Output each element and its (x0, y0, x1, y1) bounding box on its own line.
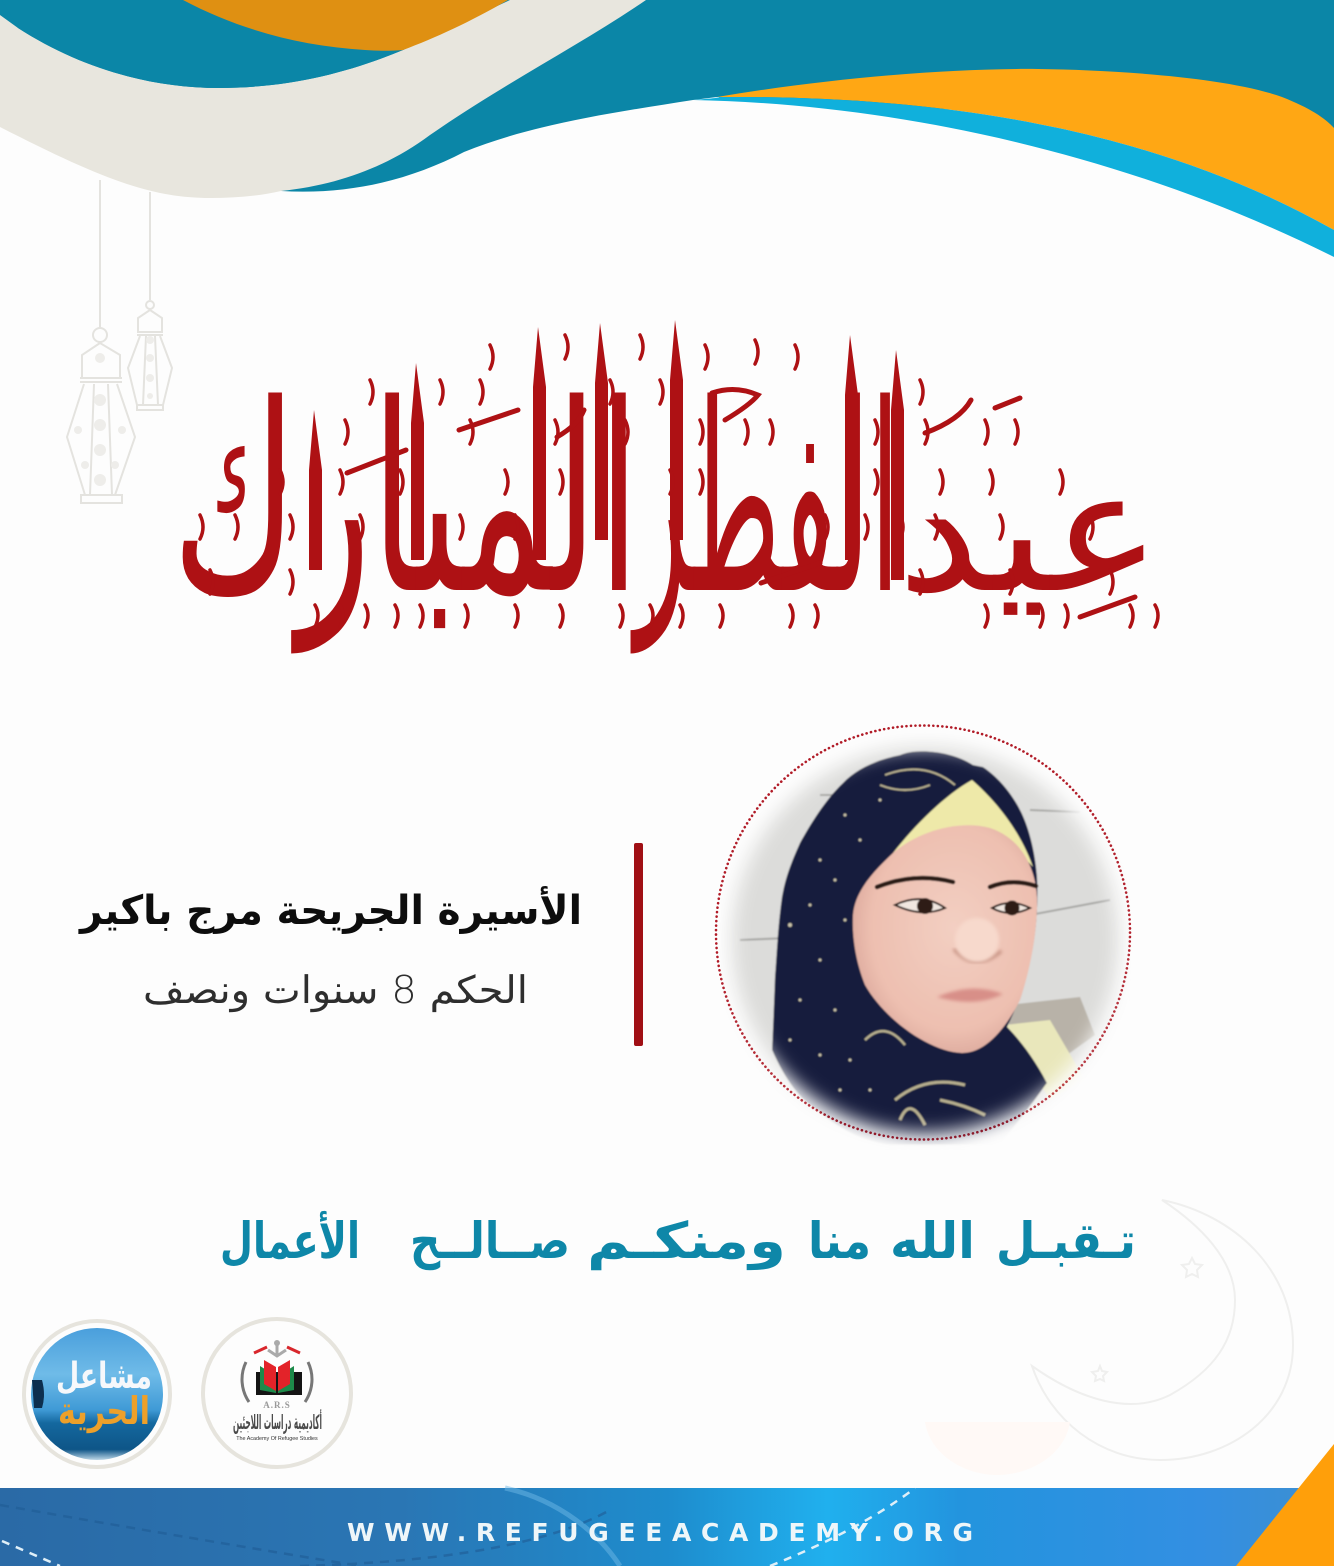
logo: Mashaal al-Hurriya: الحرية (58, 1389, 150, 1433)
blessing line: صــالــح (410, 1212, 570, 1271)
scarf sparkles (788, 769, 985, 1125)
dark orange lobe (183, 0, 508, 51)
brows (877, 878, 1036, 887)
top wave banner (0, 0, 1334, 257)
title calligraphy: Eid al-Fitr al-Mubarak: المبارك (172, 350, 640, 653)
lips (937, 989, 1003, 1002)
blessing line: تـقبـل (996, 1212, 1136, 1270)
faint pink semicircle (925, 1422, 1070, 1475)
laurel ring (242, 1362, 312, 1402)
title calligraphy: Eid al-Fitr al-Mubarak (172, 320, 1162, 653)
icon: hanging lanterns (67, 180, 172, 503)
face (853, 825, 1037, 1053)
logo: Mashaal al-Hurriya: مشاعل (56, 1356, 152, 1397)
orange wave (717, 69, 1334, 230)
blessing line (220, 1210, 1136, 1271)
eyes (895, 899, 945, 912)
dotted portrait ring (716, 726, 1130, 1140)
website url: WWW.REFUGEEACADEMY.ORG (347, 1518, 973, 1547)
book (256, 1372, 302, 1395)
blessing line: الله (890, 1212, 975, 1270)
logo: Academy of Refugee Studies (203, 1319, 351, 1467)
orange corner triangle (1236, 1444, 1334, 1566)
portrait photo panel (716, 726, 1130, 1150)
blessing line: الأعمال (220, 1210, 360, 1270)
logo: Academy of Refugee Studies: A.R.S (263, 1400, 291, 1410)
beige wave (0, 0, 646, 198)
dark teal top left lobe (2, 0, 510, 88)
vertical divider bar (634, 843, 643, 1046)
sentence text: الحكم 8 سنوات ونصف (143, 968, 528, 1013)
portrait illustration (720, 730, 1130, 1150)
prisoner name: الأسيرة الجريحة مرج باكير (78, 885, 582, 934)
blessing line: منا (808, 1212, 871, 1270)
decorative ticks around calligraphy (200, 335, 1158, 627)
blessing line: ومنكـم (587, 1212, 786, 1271)
title calligraphy: Eid al-Fitr al-Mubarak: عيد (897, 433, 1162, 630)
scarf (772, 751, 1047, 1145)
nose (955, 950, 1000, 962)
footer bar (0, 1444, 1334, 1566)
title calligraphy: Eid al-Fitr al-Mubarak: الفطر (630, 350, 900, 653)
icon: crescent moon with stars (1032, 1200, 1293, 1460)
logo: Mashaal al-Hurriya (24, 1321, 170, 1467)
logo: Academy of Refugee Studies: The Academy Of Refugee Studies (236, 1436, 318, 1442)
light blue stripe (693, 97, 1334, 257)
decorative tall stems (309, 320, 904, 580)
text: أكاديمية دراسات اللاجئين (233, 1408, 322, 1434)
yellow under-scarf (893, 780, 1033, 867)
